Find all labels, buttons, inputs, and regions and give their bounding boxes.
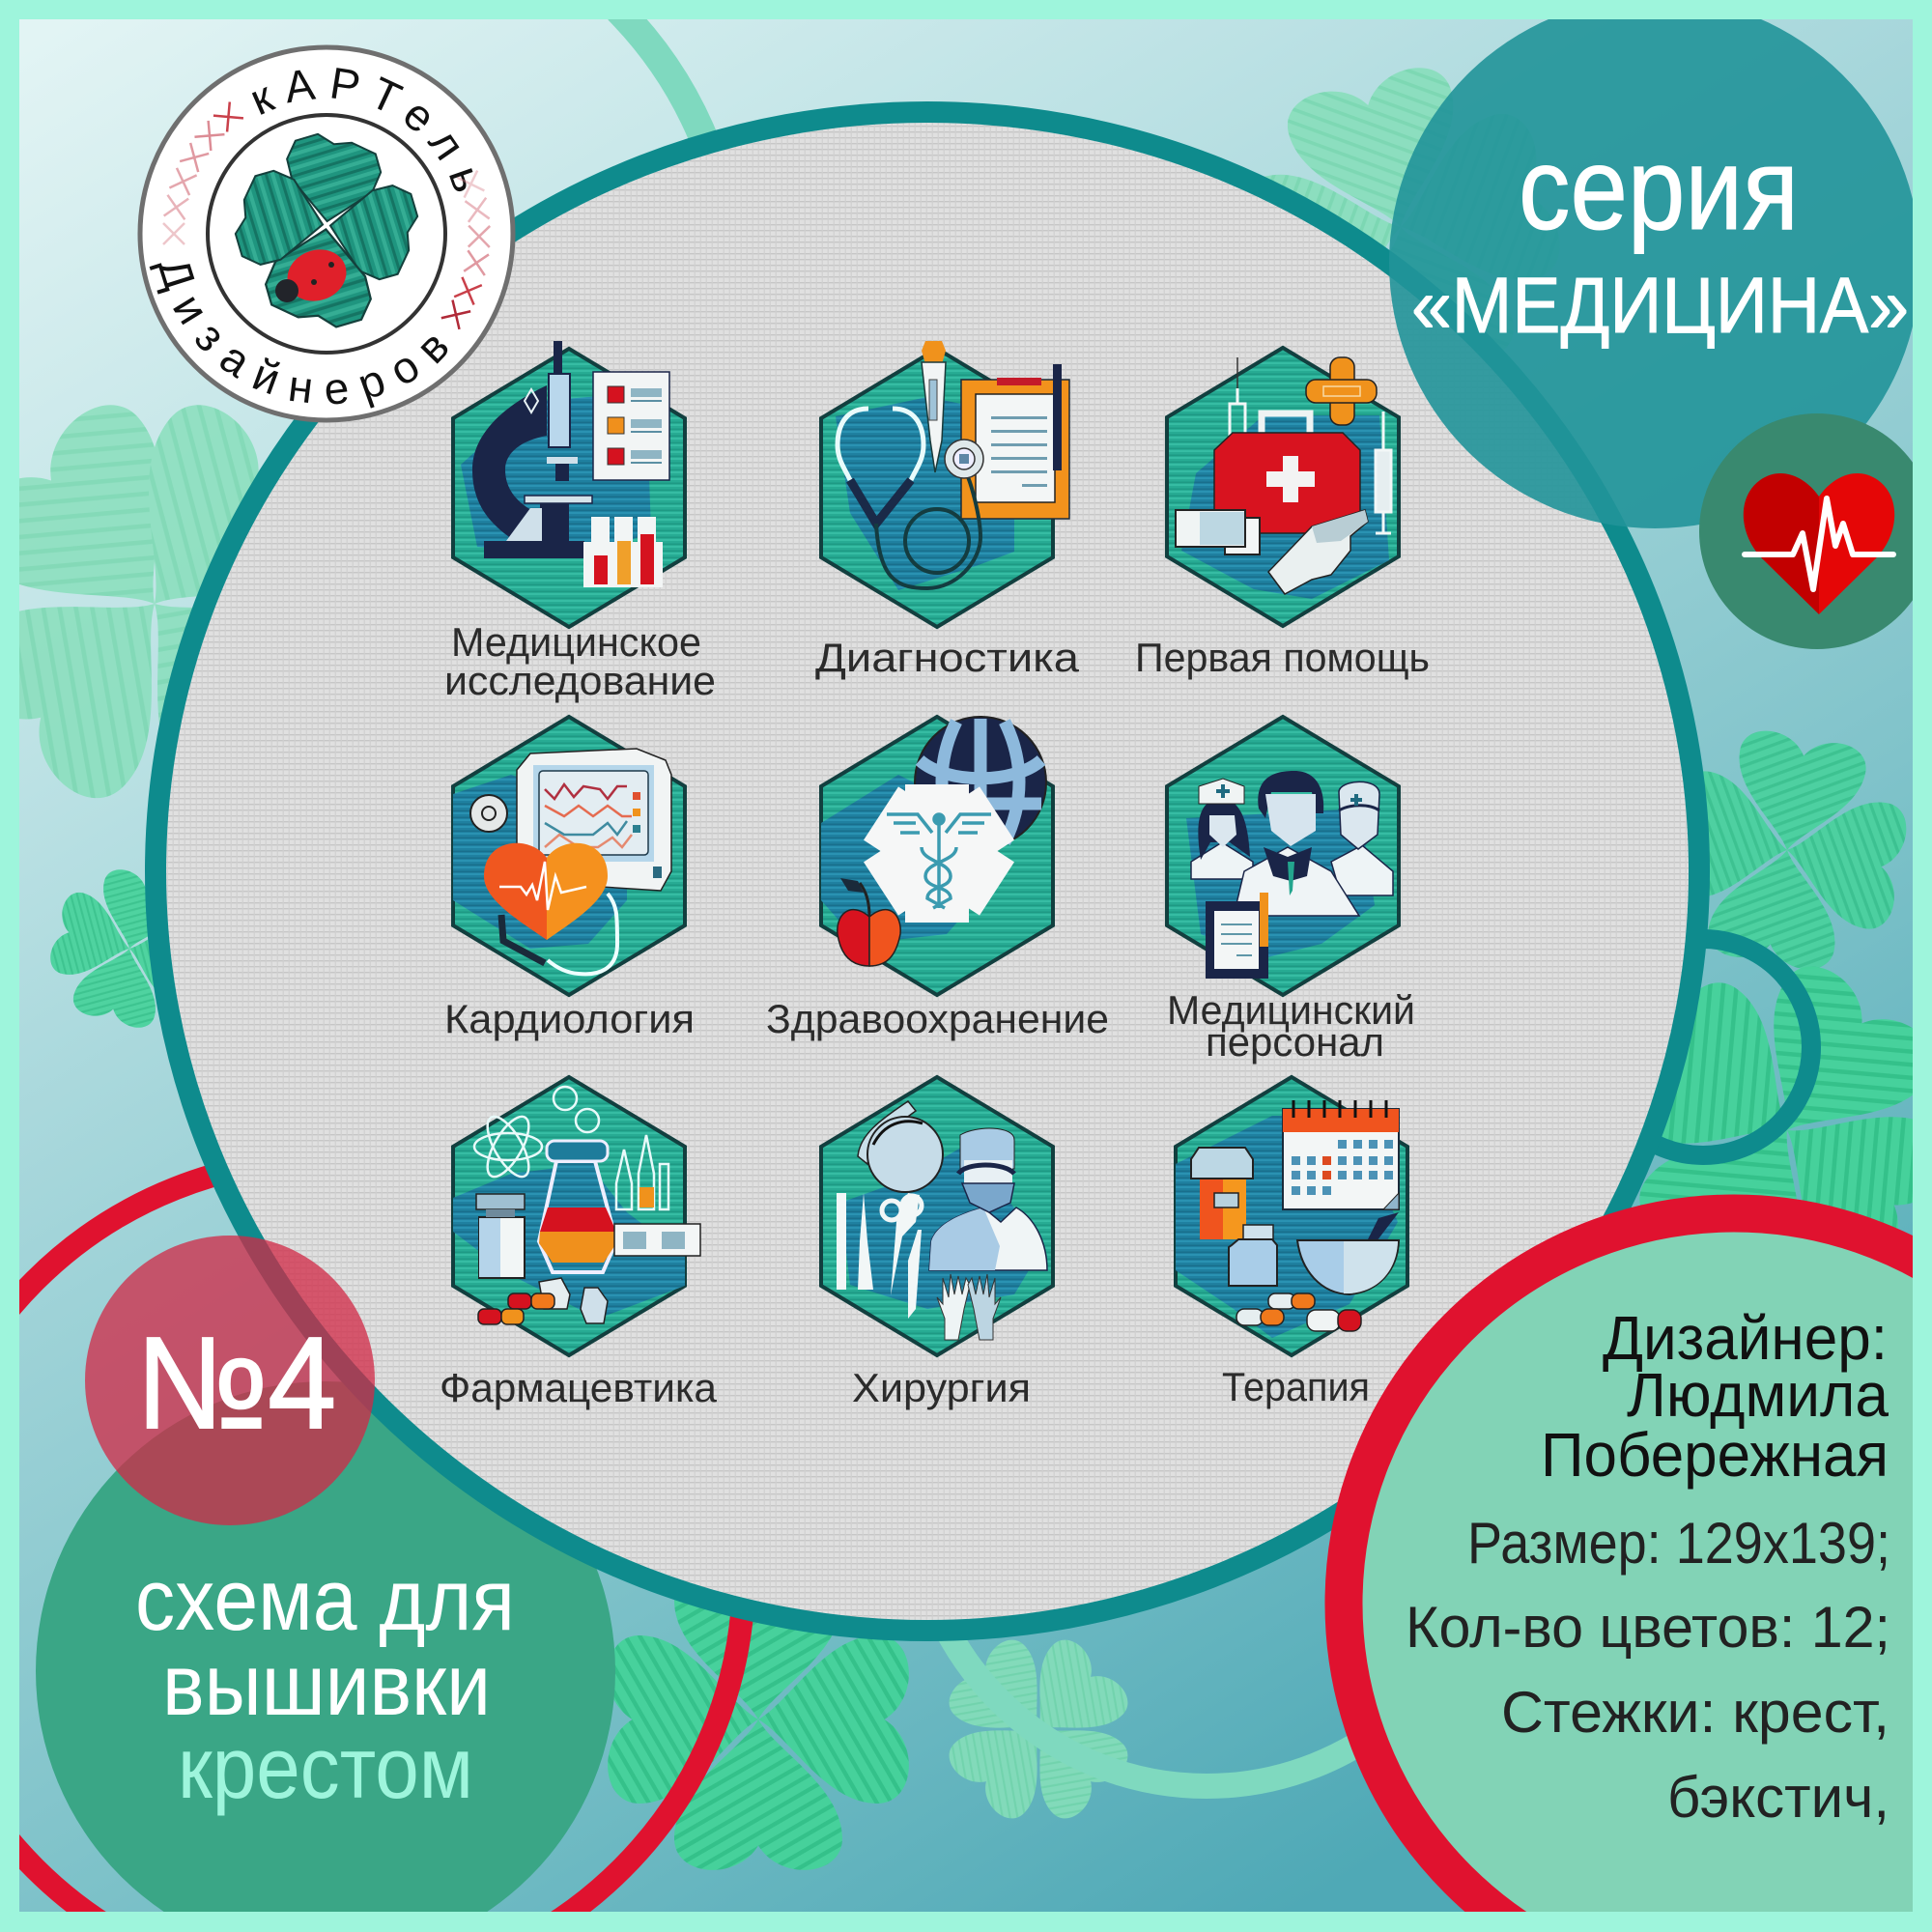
- number text: №4: [136, 1310, 336, 1456]
- panel: Здравоохранение: [766, 717, 1109, 1041]
- logo badge: [137, 44, 516, 423]
- doctor: [1234, 771, 1359, 916]
- ladybug: [275, 242, 354, 309]
- cable: [501, 894, 617, 974]
- designer info text: Дизайнер:: [1603, 1303, 1888, 1373]
- clipboard: [961, 364, 1069, 519]
- ampoules: [616, 1135, 668, 1209]
- label: Медицинское: [451, 619, 701, 665]
- atom: [474, 1111, 542, 1182]
- plaster: [1306, 357, 1377, 425]
- panel: Медицинский персонал: [1167, 717, 1415, 1065]
- pill bottle: [1191, 1148, 1253, 1239]
- scheme caption: [135, 1552, 515, 1817]
- panel: Первая помощь: [1135, 348, 1430, 680]
- capsules: [1236, 1293, 1361, 1331]
- decorative clover: left large: [0, 387, 366, 815]
- heart circle icon: [1699, 413, 1932, 649]
- label: Первая помощь: [1135, 635, 1430, 680]
- mint ring at bottom centre: [913, 1199, 1500, 1786]
- right nurse: [1331, 781, 1393, 895]
- number circle: [85, 1236, 375, 1525]
- stitched crosses: [163, 101, 490, 329]
- series heading: серия: [1519, 123, 1799, 254]
- decorative clover: bottom: [608, 1569, 909, 1870]
- bandage: [1176, 510, 1260, 554]
- hexagon icon: stethoscope: [821, 341, 1069, 627]
- star of life: [881, 784, 997, 923]
- label: Кардиология: [444, 996, 695, 1041]
- label line 2: исследование: [444, 658, 716, 703]
- decorative clover: left small: [46, 866, 213, 1032]
- jar: [476, 1194, 525, 1278]
- clipboard: [1206, 893, 1268, 979]
- designer info text: Стежки: крест,: [1501, 1680, 1889, 1745]
- designer info text: Кол-во цветов: 12;: [1406, 1595, 1890, 1660]
- scheme caption: вышивки: [162, 1637, 491, 1734]
- teal ring at right: [1595, 939, 1811, 1155]
- hexagon icon: cardio monitor: [453, 717, 685, 995]
- syringes: [1230, 357, 1391, 533]
- left nurse: [1191, 779, 1253, 879]
- flask: [539, 1141, 616, 1272]
- scheme caption: крестом: [178, 1720, 473, 1817]
- green circle: [36, 1381, 615, 1932]
- panel: Хирургия: [821, 1077, 1053, 1410]
- decorative clover: bottom centre: [941, 1632, 1136, 1827]
- label: Медицинский: [1167, 987, 1415, 1033]
- surgical lamp: [858, 1101, 943, 1192]
- series heading: [1411, 123, 1909, 350]
- label line 2: персонал: [1206, 1019, 1384, 1065]
- main embroidery hoop circle: [156, 112, 1699, 1631]
- designer info text: [1406, 1303, 1890, 1830]
- label: Фармацевтика: [440, 1365, 718, 1410]
- label strip: [614, 1224, 700, 1256]
- red first-aid case: [1214, 433, 1360, 533]
- series circle: [1389, 0, 1920, 528]
- logo text top: кАРТель: [251, 68, 473, 191]
- designer info text: бэкстич,: [1667, 1765, 1889, 1830]
- designer info text: Побережная: [1541, 1420, 1889, 1490]
- label: Терапия: [1222, 1364, 1370, 1409]
- hexagon icon: first aid: [1167, 348, 1399, 626]
- heart: [484, 843, 608, 940]
- chest piece: [945, 440, 983, 478]
- label: Диагностика: [815, 635, 1080, 680]
- panel: Фармацевтика: [440, 1077, 718, 1410]
- label: Здравоохранение: [766, 996, 1109, 1041]
- hexagon icon: surgeon: [821, 1077, 1053, 1355]
- decorative clover: right upper: [1663, 726, 1911, 974]
- designer info circle: [1344, 1213, 1932, 1932]
- glove: [1268, 510, 1368, 594]
- test tubes: [583, 517, 663, 587]
- logo text bottom: Дизайнеров: [149, 263, 448, 409]
- hexagon icon: healthcare: [821, 717, 1053, 995]
- orange ampoule fill: [639, 1187, 654, 1208]
- hexagon icon: pharmacy flask: [453, 1077, 700, 1355]
- calendar: [1283, 1100, 1399, 1209]
- pills: [478, 1278, 608, 1324]
- hexagon icon: therapy: [1176, 1077, 1407, 1355]
- globe: [915, 717, 1046, 848]
- red ring at bottom left: [0, 1159, 744, 1932]
- result sheet: [593, 372, 669, 480]
- white cross: [1266, 456, 1315, 502]
- mortar and pestle: [1297, 1212, 1399, 1294]
- label: Хирургия: [852, 1365, 1031, 1410]
- mint arc near logo: [618, 10, 710, 155]
- scheme caption: схема для: [135, 1552, 515, 1649]
- panel: Диагностика: [815, 341, 1080, 680]
- monitor: [517, 749, 671, 891]
- decorative clover: top right: [1234, 60, 1568, 394]
- jar: [1229, 1225, 1277, 1286]
- disc: [470, 795, 507, 832]
- panel: Медицинское исследование: [444, 341, 716, 703]
- logo clover: [232, 130, 421, 331]
- designer info text: Размер: 129х139;: [1467, 1511, 1890, 1576]
- thermometer: [922, 341, 946, 472]
- apple: [838, 878, 900, 966]
- panel: Терапия: [1176, 1077, 1407, 1409]
- handle: [1262, 413, 1310, 439]
- surgeon: [929, 1128, 1047, 1270]
- gloves: [937, 1274, 1001, 1340]
- stethoscope: [838, 409, 980, 588]
- hexagon icon: microscope: [453, 341, 685, 627]
- caduceus: [887, 814, 991, 908]
- instruments: [837, 1193, 922, 1319]
- hexagon icon: medical staff: [1167, 717, 1399, 995]
- bubbles: [554, 1087, 599, 1132]
- designer info text: Людмила: [1627, 1360, 1889, 1430]
- panel: Кардиология: [444, 717, 695, 1041]
- decorative clover: right lower: [1609, 952, 1932, 1308]
